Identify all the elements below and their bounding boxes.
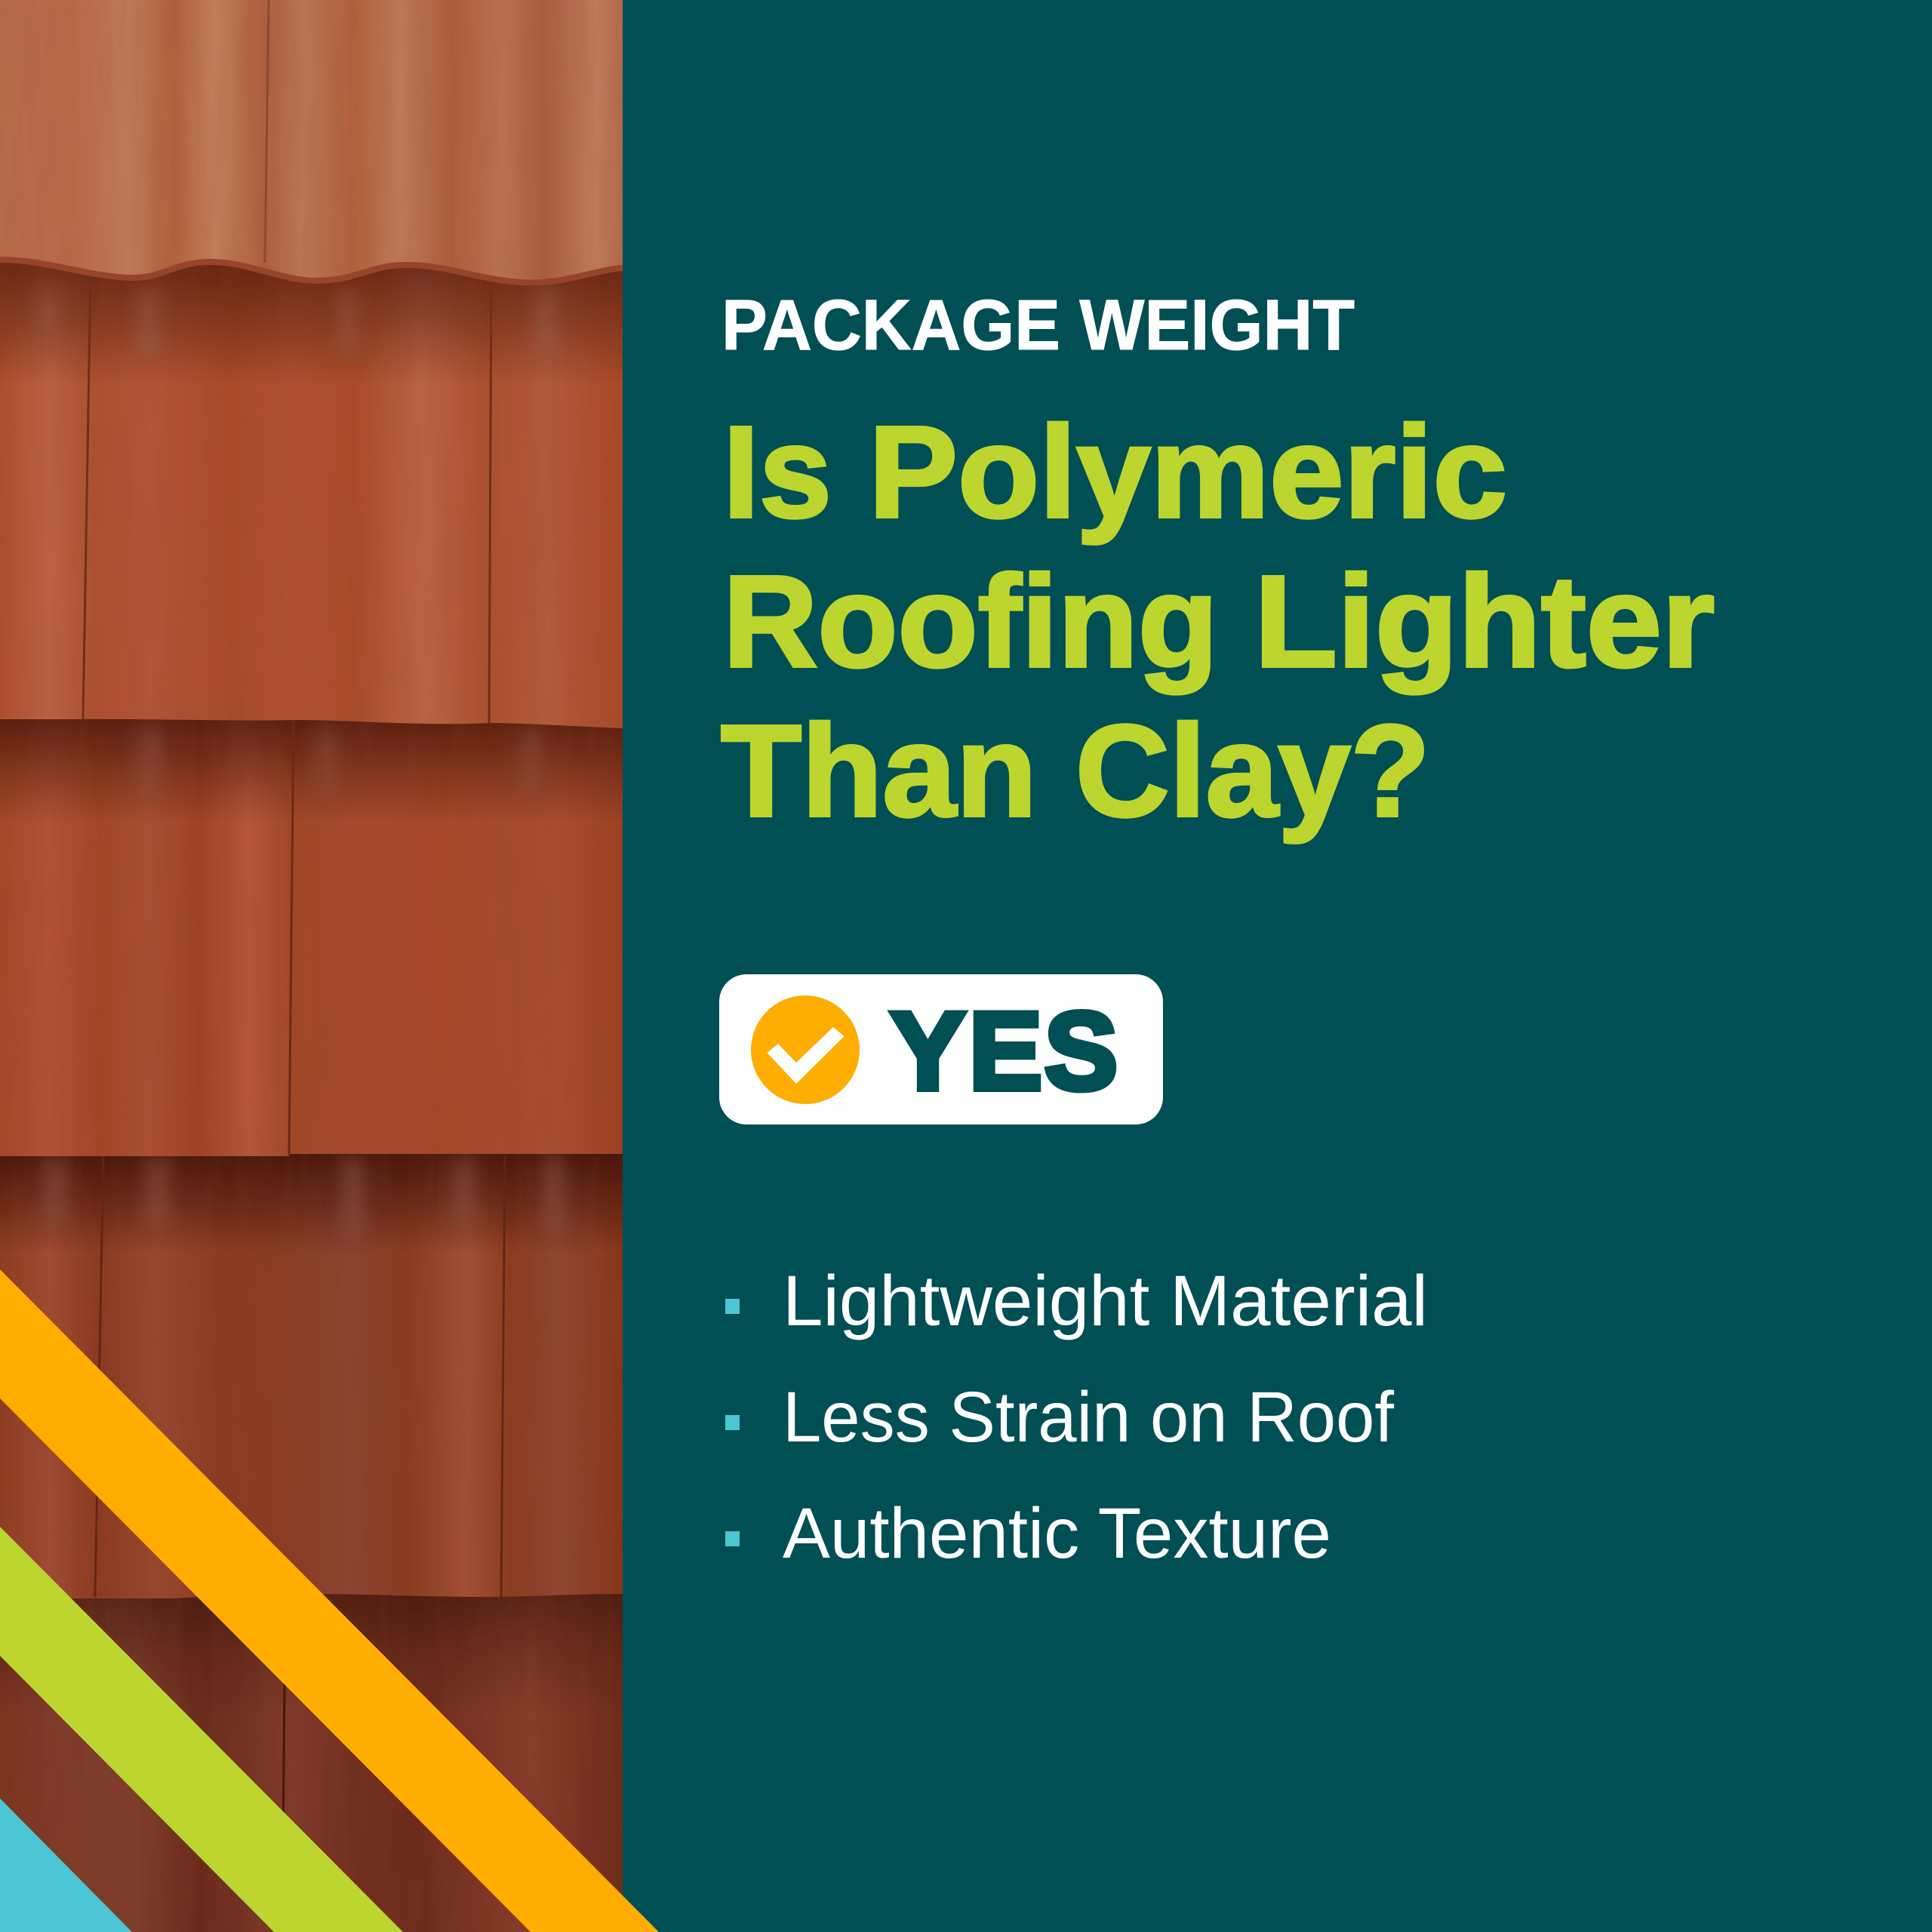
bullet: authentic texture: Authentic Texture	[783, 1494, 1331, 1574]
title: Clay?	[1075, 697, 1430, 844]
bullet list	[725, 1261, 1428, 1574]
tile row 4	[0, 1151, 623, 1598]
badge label: yes: Y	[891, 989, 965, 1112]
bullet: lightweight material: Lightweight Material	[783, 1261, 1428, 1341]
tile texture	[0, 0, 623, 1932]
tile row 3	[0, 717, 623, 1156]
yes badge	[719, 974, 1163, 1124]
badge label: yes	[891, 989, 1118, 1112]
title: Polymeric	[869, 398, 1507, 545]
title: Lighter	[1254, 548, 1715, 694]
tile row 5	[0, 1585, 623, 1932]
stripe: orange	[0, 1269, 659, 1932]
title: Is	[723, 398, 832, 545]
icon: check circle	[751, 995, 860, 1104]
tile row 2	[0, 257, 623, 728]
tile row 1	[0, 0, 623, 283]
title: Than	[721, 697, 1037, 844]
badge label: yes: S	[1044, 989, 1118, 1112]
badge background	[719, 974, 1163, 1124]
title: Roofing	[723, 548, 1218, 694]
eyebrow: package weight: PACKAGE WEIGHT	[721, 285, 1355, 365]
stripe: green	[0, 1527, 403, 1932]
stripe: blue	[0, 1798, 132, 1932]
photo: terracotta roof tiles	[0, 0, 623, 1932]
bullet: less strain on roof: Less Strain on Roof	[783, 1377, 1395, 1457]
badge label: yes: E	[969, 989, 1042, 1112]
title	[721, 398, 1715, 844]
